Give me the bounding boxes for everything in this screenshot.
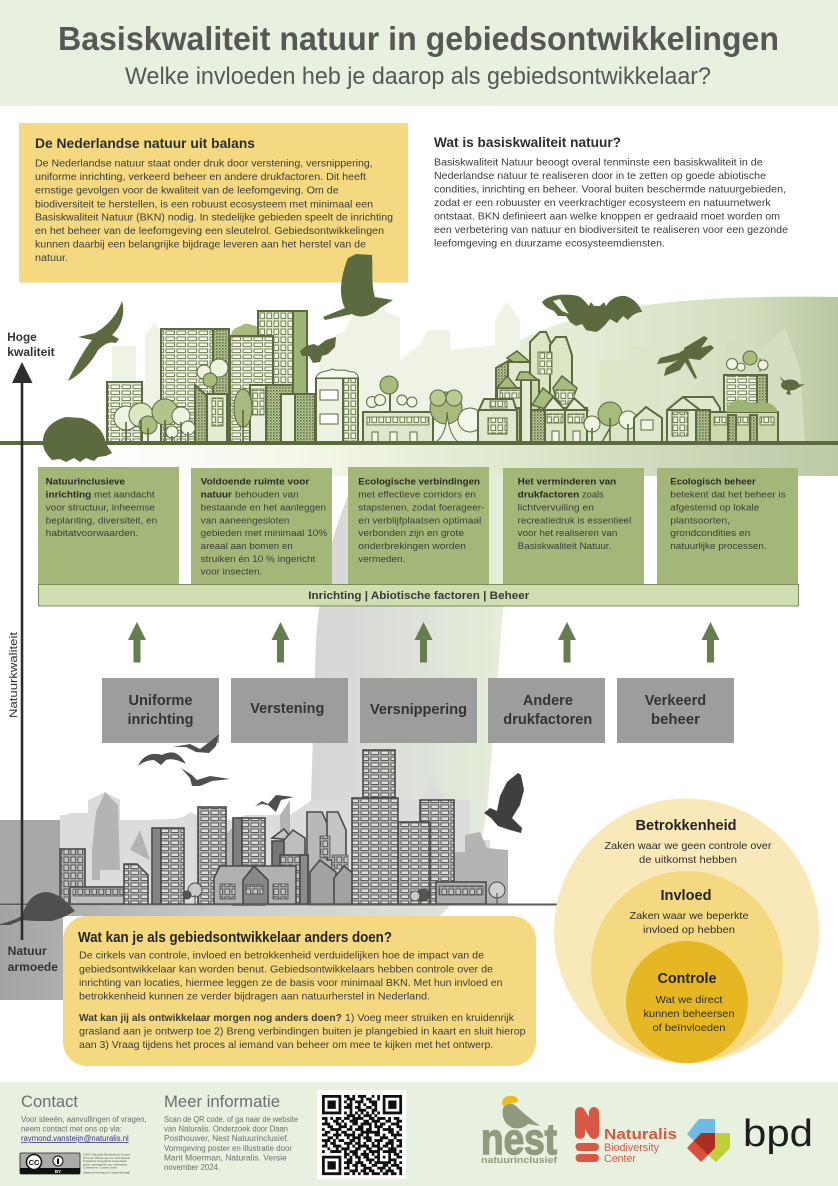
body text: zodat er een robuuster en veerkrachtiger ecosysteem en natuurnetwerk <box>434 198 772 209</box>
grey trees <box>183 882 505 904</box>
illustration: green city <box>107 311 778 442</box>
circle: Controle: kunnen beheersen <box>644 1009 735 1020</box>
body text: biodiversiteit te herstellen, is een robuust ecosysteem met minimaal een <box>35 199 373 210</box>
card: Ecologisch beheer: grondcondities en <box>670 528 750 539</box>
circle: Betrokkenheid <box>604 818 772 866</box>
icon: hedgehog <box>43 417 112 462</box>
label: Natuur armoede: Natuur <box>8 946 47 958</box>
icon: creative commons badge <box>20 1153 80 1174</box>
circle: Invloed: Zaken waar we beperkte <box>630 911 749 922</box>
panel: Wat kan je als gebiedsontwikkelaar anders doen <box>63 916 536 1066</box>
heading: Wat kan je als gebiedsontwikkelaar anders doen? <box>78 930 392 946</box>
body text: 1) Voeg meer struiken en kruidenrijk <box>345 1013 515 1024</box>
stacked houses <box>272 812 359 904</box>
licence small print: Dit is de inhoudt van een licentietekst <box>83 1156 130 1160</box>
diagram: circles of control <box>554 798 819 1064</box>
circle: Controle <box>644 971 735 1034</box>
body text: natuur. <box>35 253 68 264</box>
y-axis arrow <box>12 362 32 940</box>
card: Natuurinclusieve inrichting: habitatvoorwaarden. <box>46 528 138 539</box>
card: Voldoende ruimte voor natuur: voor insecten. <box>201 567 262 578</box>
icon: moth <box>300 337 336 363</box>
QR code <box>317 1090 406 1179</box>
card: Ecologische verbindingen: Ecologische verbindingen <box>358 477 480 488</box>
card: Het verminderen van drukfactoren: Het verminderen van <box>518 477 616 488</box>
circle: Controle: of beïnvloeden <box>652 1023 726 1034</box>
pressure box: Andere drukfactoren: drukfactoren <box>503 711 592 728</box>
icon: songbird <box>323 254 393 320</box>
icon: dragonfly <box>657 336 714 379</box>
label: Natuur armoede: armoede <box>8 962 58 974</box>
card: Het verminderen van drukfactoren: voor het realiseren van <box>518 528 617 539</box>
pressure box: Andere drukfactoren <box>488 678 605 743</box>
card: Natuurinclusieve inrichting <box>38 467 179 585</box>
heading: De Nederlandse natuur uit balans <box>35 136 255 151</box>
card: Ecologisch beheer: plantsoorten, <box>670 515 730 526</box>
title: Basiskwaliteit natuur in gebiedsontwikkelingen <box>58 20 779 57</box>
grey horizon line <box>0 904 558 906</box>
circle: Invloed: invloed op hebben <box>643 925 735 936</box>
pressure box: Verkeerd beheer: beheer <box>651 711 700 728</box>
body text: condities, inrichting en beheer. Vooral buiten beschermde natuurgebieden, <box>434 185 786 196</box>
card: Ecologische verbindingen: vermeden. <box>358 554 405 565</box>
licence small print <box>83 1152 130 1174</box>
card: Voldoende ruimte voor natuur: areaal aan bomen en <box>201 541 293 552</box>
towers right <box>352 750 486 904</box>
panel: De Nederlandse natuur uit balans <box>19 123 408 282</box>
logo: Naturalis Biodiversity Center: Center <box>604 1153 636 1165</box>
footer: meer informatie: Scan de QR code, of ga naar de website <box>164 1115 299 1124</box>
stacked houses <box>478 332 587 442</box>
body text: een verbetering van natuur en biodiversiteit te realiseren voor een gezonde <box>434 225 788 236</box>
skyline lower: grey background <box>0 778 508 904</box>
licence small print: Kosteloos hergebruik toegestaan <box>83 1159 128 1163</box>
card: Voldoende ruimte voor natuur: natuur <box>201 490 232 500</box>
logo: Naturalis Biodiversity Center <box>576 1112 677 1165</box>
footer: contact <box>21 1093 147 1143</box>
card: Ecologische verbindingen: stapstenen, zodat foerageer- <box>358 502 484 513</box>
row houses <box>214 866 296 904</box>
footer: contact: Contact <box>21 1093 78 1111</box>
footer: meer informatie <box>164 1093 299 1172</box>
logo: nest natuurinclusief: natuurinclusief <box>481 1155 558 1166</box>
circle: Betrokkenheid: Zaken waar we geen controle over <box>604 841 772 852</box>
body text: De Nederlandse natuur staat onder druk door verstening, versnippering, <box>35 158 373 170</box>
card: Ecologische verbindingen: en verblijfplaatsen optimaal <box>358 515 481 526</box>
body text: aan 3) Vraag tijdens het proces al iemand van beheer om mee te kijken met het ontwerp. <box>79 1040 493 1051</box>
body text: betrokkenheid kunnen ze verder bijdragen aan natuurherstel in Nederland. <box>79 992 430 1002</box>
card: Het verminderen van drukfactoren: drukfactoren <box>518 490 579 500</box>
card: Natuurinclusieve inrichting: voor structuur, inheemse <box>46 502 155 513</box>
card: Voldoende ruimte voor natuur: Voldoende ruimte voor <box>201 477 310 488</box>
icon: bee <box>779 376 805 395</box>
licence small print: onder voorwaarde van vermelding <box>83 1162 128 1166</box>
footer band <box>0 1082 838 1186</box>
icon: rat <box>0 892 75 925</box>
footer: contact: raymond.vansteijn@naturalis.nl <box>21 1134 129 1143</box>
card: Voldoende ruimte voor natuur: gebieden met minimaal 10% <box>201 528 328 539</box>
card: Voldoende ruimte voor natuur: bestaande en het aanleggen <box>201 502 326 513</box>
tower with roof trees <box>710 351 778 442</box>
circle: Betrokkenheid: de uitkomst hebben <box>639 855 737 866</box>
body text: kunnen daarbij een belangrijke bijdrage leveren aan het herstel van de <box>35 239 366 250</box>
background flow band: nature quality <box>100 297 838 916</box>
licence small print: (Naamsvermelding 4.0 internationaal) <box>83 1170 130 1174</box>
body text: leefomgeving en duurzame ecosysteemdiensten. <box>434 239 665 250</box>
card: Ecologisch beheer: afgestemd op lokale <box>670 502 759 513</box>
card: Natuurinclusieve inrichting: inrichting <box>46 490 91 500</box>
pressure box: Versnippering <box>360 678 477 743</box>
circle: Invloed <box>630 888 749 936</box>
body text: Wat kan jij als ontwikkelaar morgen nog anders doen? <box>79 1013 342 1024</box>
card: Ecologische verbindingen: onderbrekingen worden <box>358 541 466 552</box>
ground band lower <box>0 906 450 1000</box>
card: Natuurinclusieve inrichting: beplanting, diversiteit, en <box>46 515 157 526</box>
label: Hoge kwaliteit: Hoge <box>7 332 37 344</box>
footer: meer informatie: november 2024. <box>164 1163 220 1172</box>
card: Ecologisch beheer: natuurlijke processen. <box>670 541 767 552</box>
pressure box: Uniforme inrichting: Uniforme <box>128 692 192 709</box>
pressure box: Uniforme inrichting <box>102 678 219 743</box>
buildings left <box>60 807 265 905</box>
footer: meer informatie: Meer informatie <box>164 1093 280 1111</box>
icon: creative commons badge: CC <box>29 1158 40 1167</box>
circle: Controle: Wat we direct <box>656 995 723 1006</box>
pressure box: Verstening <box>231 678 348 743</box>
card: Natuurinclusieve inrichting: Natuurinclusieve <box>46 477 125 488</box>
card: Ecologisch beheer: Ecologisch beheer <box>670 477 756 488</box>
icon: bat <box>542 295 642 332</box>
label: Natuurkwaliteit: Natuurkwaliteit <box>8 632 20 718</box>
footer: contact: neem contact met ons op via: <box>21 1124 122 1134</box>
heading: Wat is basiskwaliteit natuur? <box>434 135 621 150</box>
body text <box>434 158 788 250</box>
label: Hoge kwaliteit: kwaliteit <box>7 347 55 359</box>
bar: Inrichting, Abiotische factoren, Beheer: Inrichting | Abiotische factoren | Beheer <box>308 590 530 602</box>
card: Voldoende ruimte voor natuur: van aaneengesloten <box>201 515 289 526</box>
body text: Basiskwaliteit Natuur (BKN) nodig. In stedelijke gebieden speelt de inrichting <box>35 213 393 224</box>
logo: Naturalis Biodiversity Center: Naturalis <box>604 1126 677 1143</box>
licence small print: 2024. Naturalis Biodiversity Center <box>83 1152 130 1156</box>
card: Voldoende ruimte voor natuur: struiken én 10 % ingericht <box>201 554 316 565</box>
card: Ecologisch beheer: betekent dat het beheer is <box>670 490 786 500</box>
body text: uniforme inrichting, verkeerd beheer en andere drukfactoren. Dit heeft <box>35 172 366 183</box>
card: Voldoende ruimte voor natuur: behouden van <box>235 490 299 500</box>
footer: contact: Voor ideeën, aanvullingen of vragen, <box>21 1115 147 1124</box>
trees left <box>114 359 252 442</box>
body text: ontstaat. BKN definieert aan welke knoppen er gedraaid moet worden om <box>434 212 780 223</box>
body text: grasland aan je ontwerp toe 2) Breng verbindingen buiten je plangebied in kaart en sluit hierop <box>79 1027 526 1038</box>
circle: Controle: Controle <box>658 971 716 987</box>
logo: bpd mark <box>687 1119 730 1162</box>
icon: swift bird <box>68 301 123 381</box>
body text <box>35 158 393 264</box>
houses right <box>634 397 720 442</box>
pressure box: Andere drukfactoren: Andere <box>523 692 573 709</box>
card: Ecologische verbindingen <box>348 467 489 585</box>
pressure box: Verkeerd beheer: Verkeerd <box>645 692 706 709</box>
icon: creative commons badge: BY <box>55 1169 61 1174</box>
body text: Nederlandse natuur te realiseren door in te zetten op goede abiotische <box>434 171 766 182</box>
circle: Invloed: Invloed <box>660 888 712 904</box>
body text <box>79 951 526 1051</box>
card: Ecologische verbindingen: verbonden zijn en grote <box>358 528 464 539</box>
arrows up <box>128 622 720 662</box>
label: Hoge kwaliteit <box>7 332 55 359</box>
header band <box>0 0 838 106</box>
licence small print: Creative Commons <box>83 1166 118 1170</box>
pressure box: Uniforme inrichting: inrichting <box>128 711 194 728</box>
card: Het verminderen van drukfactoren: lichtvervuiling en <box>518 502 594 513</box>
pressure box: Verkeerd beheer <box>617 678 734 743</box>
body text: Basiskwaliteit Natuur beoogt overal tenminste een basiskwaliteit in de <box>434 158 763 169</box>
card: Het verminderen van drukfactoren: recreatiedruk is essentieel <box>518 515 631 526</box>
logo: nest natuurinclusief: nest <box>481 1115 557 1164</box>
pale skyline behind green city <box>106 302 805 442</box>
footer: meer informatie: Posthouwer, Nest Natuurinclusief. <box>164 1134 289 1143</box>
body text: ernstige gevolgen voor de kwaliteit van de leefomgeving. Om de <box>35 186 339 197</box>
green horizon line <box>0 441 838 445</box>
logo: nest natuurinclusief <box>481 1096 558 1166</box>
card: Natuurinclusieve inrichting: met aandacht <box>94 490 155 500</box>
body text: en het beheer van de leefomgeving een sleutelrol. Gebiedsontwikkelingen <box>35 226 384 237</box>
footer: meer informatie: Vormgeving poster en illustratie door <box>164 1144 292 1153</box>
card: Het verminderen van drukfactoren: Basiskwaliteit Natuur. <box>518 541 611 552</box>
logo: bpd wordmark: bpd <box>743 1113 813 1155</box>
card: Voldoende ruimte voor natuur <box>191 468 332 585</box>
icon: pigeon <box>484 773 524 833</box>
pressure box: Verstening: Verstening <box>250 700 324 717</box>
footer: meer informatie: Marit Moerman, Naturalis. Versie <box>164 1153 287 1162</box>
card: Ecologisch beheer <box>657 468 798 585</box>
body text: gebiedsontwikkelaar kan worden benut. Gebiedsontwikkelaars hebben controle over de <box>79 964 493 976</box>
body text: De cirkels van controle, invloed en betrokkenheid verduidelijken hoe de impact van de <box>79 951 484 962</box>
pressure box: Versnippering: Versnippering <box>370 701 467 718</box>
building cluster left <box>107 311 358 442</box>
body text: inrichting van locaties, hiermee leggen ze de basis voor minimaal BKN. Met hun invloed en <box>79 978 503 989</box>
subtitle: Welke invloeden heb je daarop als gebiedsontwikkelaar? <box>125 63 711 90</box>
card: Het verminderen van drukfactoren: zoals <box>582 490 604 500</box>
trees center right <box>584 402 637 442</box>
icons: gulls <box>138 734 294 812</box>
card: Ecologische verbindingen: met effectieve corridors en <box>358 490 476 500</box>
illustration: grey city <box>60 750 505 905</box>
panel: Wat is basiskwaliteit natuur <box>434 135 788 250</box>
footer: meer informatie: van Naturalis. Onderzoek door Daan <box>164 1125 288 1134</box>
bar: Inrichting, Abiotische factoren, Beheer <box>38 584 798 606</box>
circle: Betrokkenheid: Betrokkenheid <box>636 818 736 834</box>
card: Het verminderen van drukfactoren <box>503 468 644 585</box>
label: Natuur armoede <box>8 946 58 974</box>
tree middle <box>430 390 482 442</box>
low building and roof trees <box>363 376 433 442</box>
logo: Naturalis Biodiversity Center: Biodiversity <box>604 1142 659 1154</box>
